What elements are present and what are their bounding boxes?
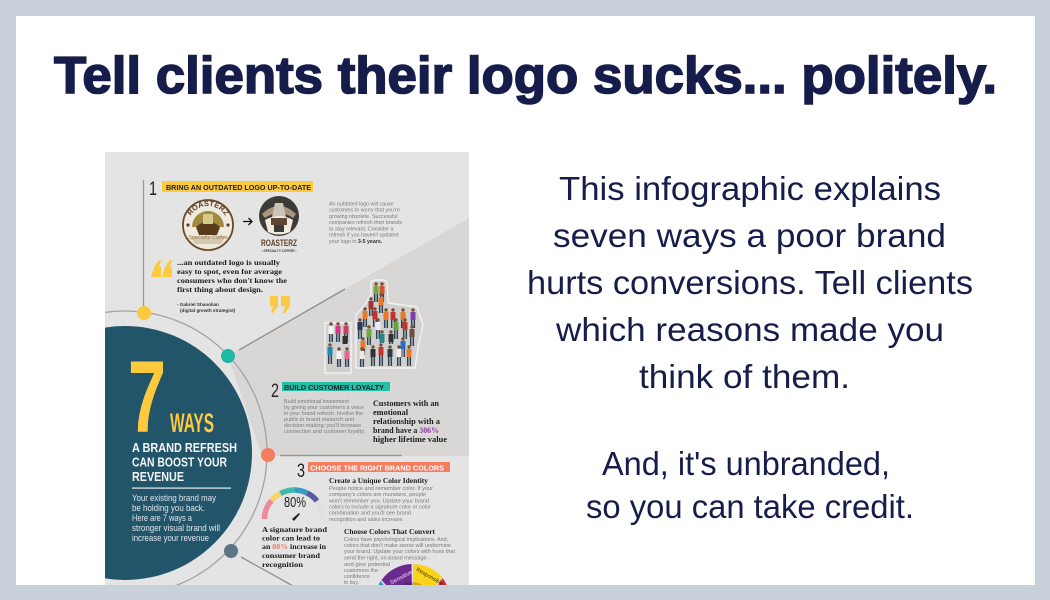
body text 1: refresh if you haven't updated xyxy=(329,233,399,239)
body text 3b: customers the xyxy=(344,568,378,574)
body text 3b: and give potential xyxy=(344,562,390,568)
body text 3a: People notice and remember color. If your xyxy=(329,486,433,492)
crowd heads xyxy=(328,282,415,351)
description paragraph: seven ways a poor brand xyxy=(553,217,946,254)
unbranded note xyxy=(586,445,914,525)
WAYS: WAYS xyxy=(170,408,214,438)
circle headline: REVENUE xyxy=(132,469,184,484)
signature color stat: consumer brand xyxy=(262,551,321,560)
body text 1: to stay relevant. Consider a xyxy=(329,226,394,232)
unbranded note: And, it's unbranded, xyxy=(602,445,890,482)
color wheel: Sensitive xyxy=(389,569,414,586)
body text 1: An outdated logo will cause xyxy=(329,202,394,208)
new round logo xyxy=(259,196,299,253)
body text 1: customers to worry that you're xyxy=(329,208,400,214)
ring with connector lines xyxy=(105,180,402,585)
circle paragraph: be holding you back. xyxy=(132,503,205,514)
coral heading bar: CHOOSE THE RIGHT BRAND COLORS xyxy=(310,464,444,472)
number 1: 1 xyxy=(149,179,157,200)
description paragraph: hurts conversions. Tell clients xyxy=(527,264,973,301)
circle headline xyxy=(132,443,236,481)
lifetime value stat: brand have a 306% xyxy=(373,426,439,435)
unbranded note: so you can take credit. xyxy=(586,488,914,525)
circle paragraph xyxy=(132,493,220,544)
body text 3b: to buy. xyxy=(344,580,359,586)
infographic thumbnail xyxy=(105,152,469,585)
arrow xyxy=(243,218,252,225)
body text 3b: send the right, on-brand message - xyxy=(344,556,430,562)
lifetime value stat: Customers with an xyxy=(373,399,440,408)
color wheel xyxy=(378,564,447,585)
crowd forming a thumbs-up xyxy=(325,280,423,373)
old round logo xyxy=(182,199,234,251)
old round logo: Specialty Coffee xyxy=(188,235,228,241)
yellow heading bar: BRING AN OUTDATED LOGO UP-TO-DATE xyxy=(166,183,311,192)
dark teal circle xyxy=(105,326,252,580)
description paragraph: which reasons made you xyxy=(555,311,944,348)
section 3: brand colors xyxy=(262,462,455,585)
body text 3a: won't remember you. Update your brand xyxy=(329,498,429,504)
timeline nodes xyxy=(137,306,275,558)
quote xyxy=(177,258,288,294)
body text 1: your logo in 3-5 years. xyxy=(329,239,383,245)
thumb outline xyxy=(325,280,423,373)
color wheel: Responsible xyxy=(415,567,444,587)
description paragraph: This infographic explains xyxy=(559,170,941,207)
body text 3a: company's colors are mundane, people xyxy=(329,492,426,498)
section 2: customer loyalty xyxy=(271,381,447,444)
lifetime value stat: emotional xyxy=(373,408,409,417)
circle paragraph: Your existing brand may xyxy=(132,493,216,504)
number 2: 2 xyxy=(271,381,279,402)
subheading: colors that convert: Choose Colors That Convert xyxy=(344,528,436,536)
quote attribution: (digital growth strategist) xyxy=(180,308,236,313)
quote: consumers who don't know the xyxy=(177,276,288,285)
quote marks xyxy=(151,260,290,313)
body text 2: public in brand research and xyxy=(284,417,354,423)
signature color stat: color can lead to xyxy=(262,534,320,542)
teal heading bar: BUILD CUSTOMER LOYALTY xyxy=(284,383,384,392)
circle paragraph: stronger visual brand will xyxy=(132,523,220,534)
body text 3b: confidence xyxy=(344,574,370,580)
body text 2: Build emotional investment xyxy=(284,399,350,405)
subheading: unique color identity: Create a Unique Color Identity xyxy=(329,477,429,485)
quote attribution: - Gabriel Shaoolian xyxy=(177,302,219,307)
body text 1 xyxy=(329,202,402,245)
gauge 80% xyxy=(264,490,322,521)
circle headline: CAN BOOST YOUR xyxy=(132,454,227,470)
description paragraph: think of them. xyxy=(639,358,850,395)
lifetime value stat xyxy=(373,399,447,444)
crowd bodies xyxy=(328,286,416,359)
darker diagonal band xyxy=(228,218,469,456)
body text 1: growing obsolete. Successful xyxy=(329,214,398,220)
quote: ...an outdated logo is usually xyxy=(177,258,280,267)
crowd legs xyxy=(329,294,414,367)
circle paragraph: Here are 7 ways a xyxy=(132,513,193,524)
signature color stat: A signature brand xyxy=(262,525,328,534)
lifetime value stat: higher lifetime value xyxy=(373,435,447,444)
signature color stat xyxy=(262,525,328,569)
big seven: 7 xyxy=(128,340,166,454)
body text 3b: colors that don't make sense will undermine xyxy=(344,543,451,549)
body text 3b: your brand. Update your colors with hues that xyxy=(344,549,456,555)
old round logo: ROASTERZ xyxy=(187,201,229,216)
quote attribution xyxy=(177,302,236,313)
body text 2: in your brand refresh. Involve the xyxy=(284,411,363,417)
body text 1: companies refresh their brands xyxy=(329,220,402,226)
body text 3a: combination and you'll see brand xyxy=(329,510,411,516)
lifetime value stat: relationship with a xyxy=(373,417,440,426)
quote: first thing about design. xyxy=(177,285,263,294)
quote: easy to spot, even for average xyxy=(177,267,283,276)
title: Tell clients their logo sucks... politely. xyxy=(54,47,997,105)
body text 2: decision-making; you'll increase xyxy=(284,423,361,429)
body text 3a: recognition and sales increase. xyxy=(329,517,404,523)
body text 3b: Colors have psychological implications. And, xyxy=(344,537,448,543)
number 3: 3 xyxy=(297,461,305,482)
body text 3a xyxy=(329,486,433,523)
section 1: outdated logo xyxy=(150,181,402,313)
gauge 80%: 80% xyxy=(284,494,306,511)
body text 2: by giving your customers a voice xyxy=(284,405,364,411)
body text 2: connection and customer loyalty. xyxy=(284,429,365,435)
body text 2 xyxy=(284,399,365,435)
signature color stat: an 80% increase in xyxy=(262,542,327,551)
circle paragraph: increase your revenue xyxy=(132,533,209,544)
body text 3b xyxy=(344,537,456,586)
new round logo: • SPECIALTY COFFEE • xyxy=(262,249,297,253)
signature color stat: recognition xyxy=(262,560,304,569)
description paragraph xyxy=(527,170,973,395)
body text 3a: colors to include a signature color or color xyxy=(329,504,431,510)
new round logo: ROASTERZ xyxy=(261,238,297,248)
circle headline: A BRAND REFRESH xyxy=(132,440,237,455)
